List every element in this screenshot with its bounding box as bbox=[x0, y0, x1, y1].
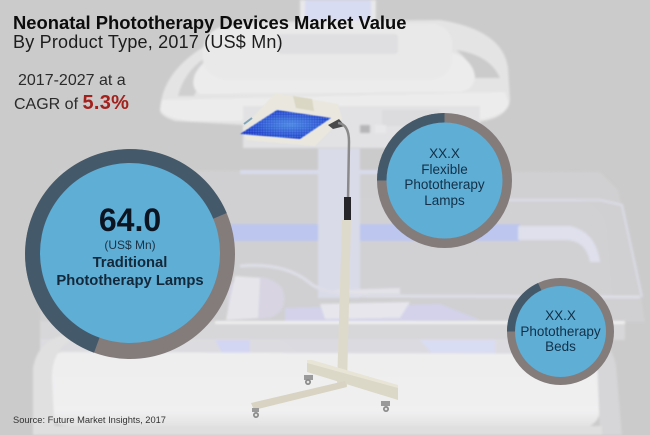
rail bbox=[40, 321, 625, 340]
big value: 64.0 bbox=[99, 202, 161, 238]
category label: flexible: Phototherapy bbox=[404, 177, 485, 192]
device outer handle bbox=[160, 20, 510, 125]
category label: beds: Beds bbox=[545, 339, 576, 354]
second tier bbox=[193, 52, 475, 94]
device body bbox=[203, 24, 452, 80]
baby silhouette bbox=[228, 277, 284, 320]
category label: traditional: Traditional bbox=[93, 255, 167, 271]
casters bbox=[252, 375, 390, 412]
category label: beds: XX.X bbox=[545, 308, 576, 323]
category label: beds bbox=[520, 308, 601, 354]
category label: flexible bbox=[404, 146, 485, 208]
cagr callout bbox=[14, 72, 129, 114]
category label: flexible: Lamps bbox=[424, 192, 465, 208]
mattress bbox=[42, 352, 600, 426]
stand pole bbox=[251, 123, 398, 418]
category label: flexible: XX.X bbox=[429, 146, 460, 161]
subtitle: By Product Type, 2017 (US$ Mn) bbox=[13, 32, 283, 52]
category label: beds: Phototherapy bbox=[520, 324, 601, 338]
category label: traditional: Phototherapy Lamps bbox=[56, 273, 204, 289]
cagr callout: 2017-2027 at a bbox=[18, 72, 126, 89]
source note: Source: Future Market Insights, 2017 bbox=[13, 415, 166, 425]
category label: traditional bbox=[56, 255, 204, 289]
control panel bbox=[278, 34, 398, 54]
lower band bbox=[160, 92, 509, 121]
stand base bbox=[307, 360, 398, 400]
unit label: (US$ Mn) bbox=[104, 238, 156, 252]
category label: flexible: Flexible bbox=[421, 162, 468, 176]
lamp bbox=[240, 93, 345, 146]
title: Neonatal Phototherapy Devices Market Value bbox=[13, 12, 406, 33]
under-rail bbox=[40, 339, 600, 355]
cagr callout: CAGR of 5.3% bbox=[14, 92, 129, 114]
monitor bbox=[300, 0, 376, 24]
crib body bbox=[40, 170, 645, 322]
front panel bbox=[243, 106, 480, 148]
